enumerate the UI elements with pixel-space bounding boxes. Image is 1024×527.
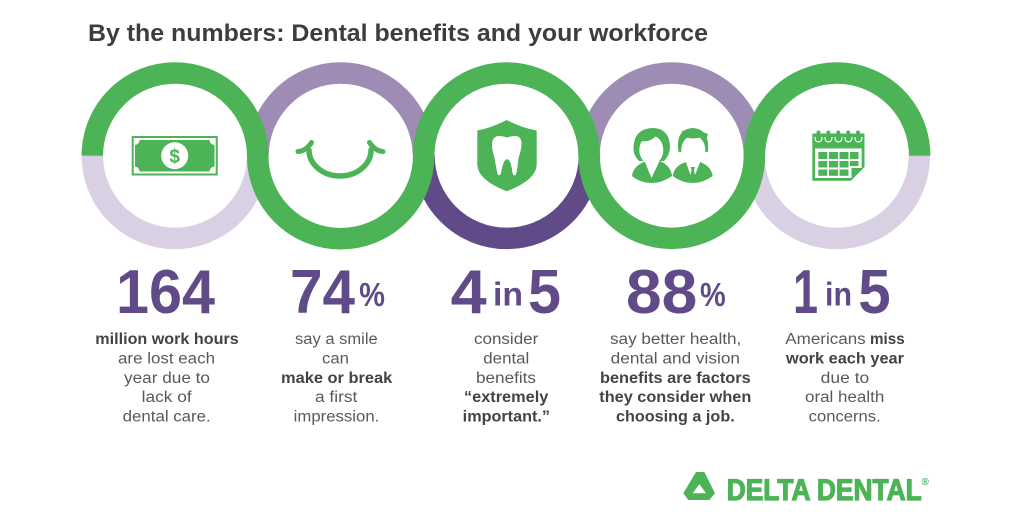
description: concerns. bbox=[809, 408, 881, 426]
description bbox=[599, 331, 751, 426]
description: can bbox=[322, 350, 349, 368]
description: miss bbox=[870, 331, 905, 348]
stat: 164 bbox=[95, 258, 239, 426]
green wave bbox=[92, 73, 920, 239]
stat: 4 in 5 bbox=[451, 258, 561, 426]
icon: tooth shield bbox=[477, 120, 537, 191]
description: dental care. bbox=[123, 408, 211, 426]
description: important.” bbox=[463, 408, 550, 426]
description: benefits bbox=[476, 370, 536, 387]
ring 3 lower half bbox=[424, 156, 589, 238]
description: “extremely bbox=[464, 389, 549, 406]
woman bbox=[632, 128, 672, 183]
number: 1 bbox=[793, 258, 818, 327]
registered mark: ® bbox=[922, 477, 930, 488]
number: 4 bbox=[451, 258, 487, 327]
description: Americans bbox=[785, 331, 866, 348]
description: dental and vision bbox=[611, 350, 740, 368]
ring 2 upper half bbox=[258, 73, 423, 156]
description: they consider when bbox=[599, 389, 751, 406]
icon: smile bbox=[298, 142, 383, 176]
number: 5 bbox=[528, 258, 561, 327]
percent sign: % bbox=[700, 276, 726, 313]
description bbox=[95, 331, 239, 426]
description: oral health bbox=[805, 389, 884, 406]
logo wordmark: DELTA DENTAL bbox=[727, 474, 922, 507]
description bbox=[785, 331, 905, 426]
number: 5 bbox=[858, 258, 891, 327]
man bbox=[673, 128, 713, 183]
description: consider bbox=[474, 331, 538, 348]
ring 4 upper half bbox=[589, 73, 754, 156]
description: due to bbox=[821, 370, 869, 387]
word in: in bbox=[493, 276, 523, 312]
description: lack of bbox=[142, 389, 192, 406]
icon: dollar bill: $ bbox=[169, 146, 180, 168]
description: are lost each bbox=[118, 350, 215, 368]
number: 88 bbox=[626, 258, 697, 327]
description: say a smile bbox=[295, 331, 378, 348]
stat: 1 in 5 bbox=[785, 258, 905, 426]
logo: Delta Dental bbox=[683, 472, 930, 507]
stat: 88% bbox=[599, 258, 751, 426]
ring 5 lower half bbox=[754, 156, 919, 238]
title: By the numbers: Dental benefits and your workforce bbox=[88, 20, 708, 47]
description: make or break bbox=[281, 370, 393, 387]
description: work each year bbox=[785, 350, 904, 368]
description: say better health, bbox=[610, 331, 741, 348]
description bbox=[463, 331, 550, 426]
logo triangle bbox=[683, 472, 715, 500]
description: year due to bbox=[124, 370, 210, 387]
description: million work hours bbox=[95, 331, 239, 348]
icon: calendar bbox=[812, 130, 864, 181]
number: 164 bbox=[116, 258, 215, 327]
description: choosing a job. bbox=[616, 408, 735, 426]
description: dental bbox=[483, 350, 529, 368]
ring chain bbox=[92, 73, 920, 239]
icon: dollar bill bbox=[133, 137, 217, 174]
percent sign: % bbox=[359, 276, 385, 313]
ring 1 lower half bbox=[92, 156, 258, 238]
description: impression. bbox=[294, 408, 379, 426]
description: a first bbox=[315, 389, 358, 406]
description bbox=[281, 331, 393, 426]
word in: in bbox=[825, 276, 852, 312]
description: benefits are factors bbox=[600, 370, 751, 387]
stat: 74% bbox=[281, 258, 393, 426]
icon: two people bbox=[632, 128, 713, 183]
number: 74 bbox=[290, 258, 355, 327]
